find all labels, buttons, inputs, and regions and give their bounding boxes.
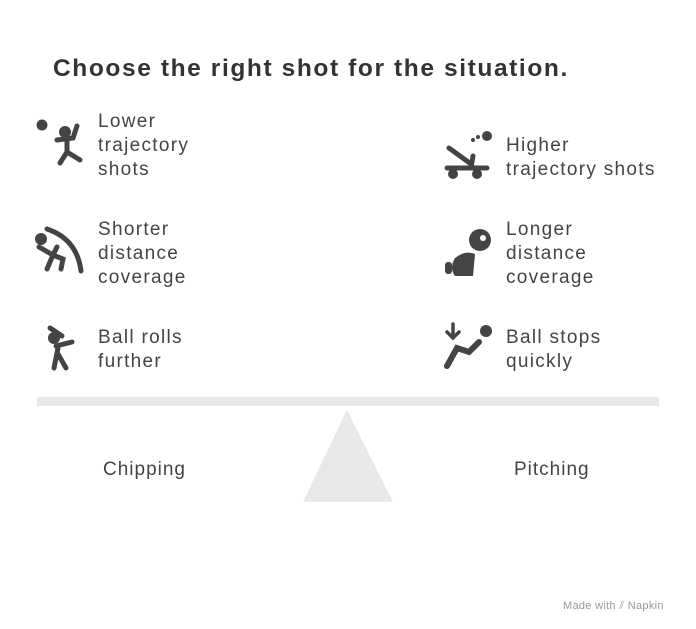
text: lower trajectory xyxy=(98,111,189,180)
icon: arrow and figure xyxy=(444,322,492,369)
text: higher trajectory: Higher xyxy=(506,135,570,156)
text: lower trajectory: shots xyxy=(98,159,150,180)
text: shorter distance: distance xyxy=(98,243,179,264)
text: shorter distance: coverage xyxy=(98,267,187,288)
icon: batter xyxy=(48,326,74,370)
title: Choose the right shot for the situation. xyxy=(53,55,569,82)
text: shorter distance xyxy=(98,219,187,288)
text: lower trajectory: trajectory xyxy=(98,135,189,156)
text: longer distance: coverage xyxy=(506,267,595,288)
icon: crouching figure xyxy=(445,229,491,276)
text: longer distance: Longer xyxy=(506,219,573,240)
icon: catapult xyxy=(444,131,492,179)
text: ball stops: Ball stops xyxy=(506,327,601,348)
icon: climber xyxy=(35,226,84,274)
text: lower trajectory: Lower xyxy=(98,111,156,132)
footer: Made with ⫽ Napkin xyxy=(563,600,664,612)
text: ball stops: quickly xyxy=(506,351,573,372)
text: shorter distance: Shorter xyxy=(98,219,169,240)
icon: volley player xyxy=(36,120,82,166)
text: ball stops xyxy=(506,327,601,372)
text: higher trajectory: trajectory shots xyxy=(506,159,656,180)
text: higher trajectory xyxy=(506,135,656,180)
text: ball rolls: further xyxy=(98,351,162,372)
text: longer distance: distance xyxy=(506,243,587,264)
label: chipping: Chipping xyxy=(103,459,186,480)
text: ball rolls xyxy=(98,327,183,372)
text: longer distance xyxy=(506,219,595,288)
text: ball rolls: Ball rolls xyxy=(98,327,183,348)
label: pitching: Pitching xyxy=(514,459,590,480)
